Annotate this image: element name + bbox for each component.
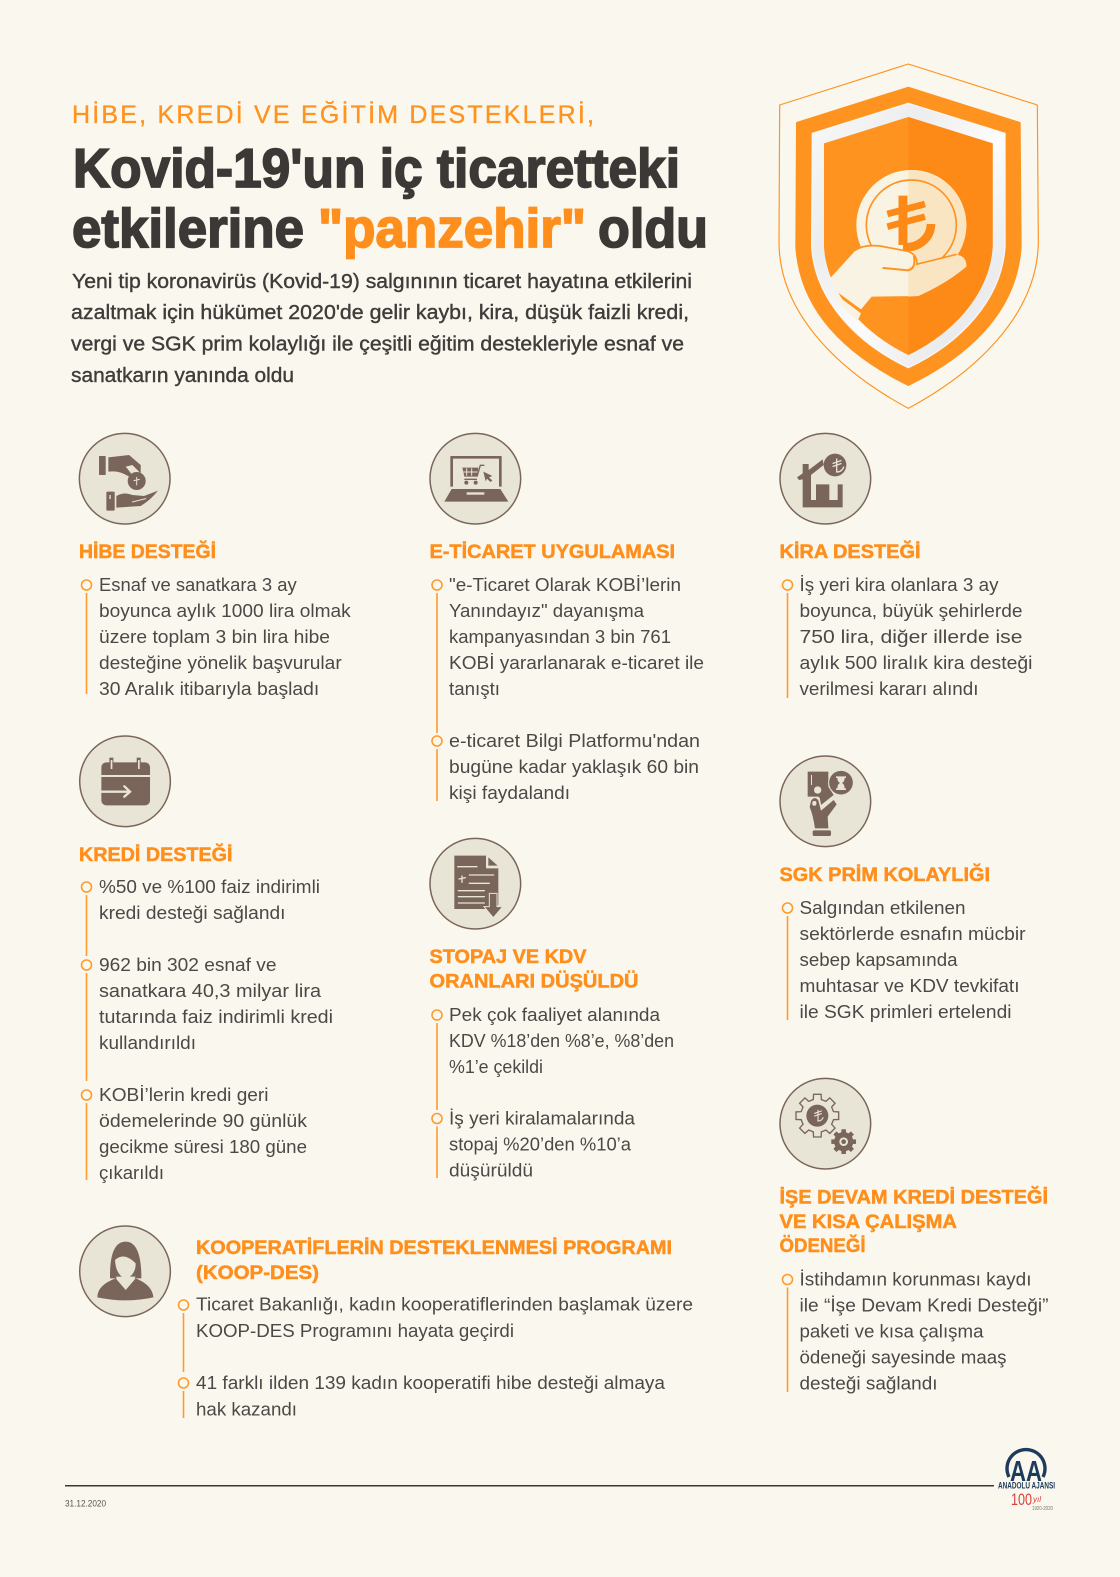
body text: kampanyasından 3 bin 761 xyxy=(449,626,671,647)
icon: gears xyxy=(780,1078,871,1169)
body text: aylık 500 liralık kira desteği xyxy=(800,652,1032,673)
intro text: Yeni tip koronavirüs (Kovid-19) salgınının ticaret hayatına etkilerini xyxy=(72,270,692,293)
logo: anadolu ajansı: yıl xyxy=(1032,1495,1041,1504)
header block xyxy=(71,100,708,387)
bullet marker xyxy=(432,580,442,733)
body text: tanıştı xyxy=(449,678,500,699)
body text: %50 ve %100 faiz indirimli xyxy=(99,876,320,897)
icon: laptop with cart xyxy=(430,433,521,524)
bullet marker xyxy=(82,580,92,694)
panel: sgk prim kolaylığı xyxy=(780,756,1026,1022)
intro text: vergi ve SGK prim kolaylığı ile çeşitli eğitim destekleriyle esnaf ve xyxy=(71,332,684,356)
intro text: azaltmak için hükümet 2020'de gelir kaybı, kira, düşük faizli kredi, xyxy=(71,301,689,324)
intro text xyxy=(71,270,692,387)
body text: paketi ve kısa çalışma xyxy=(800,1320,984,1341)
body text xyxy=(449,574,704,699)
icon: house with lira xyxy=(780,433,871,524)
heading: KİRA DESTEĞİ xyxy=(780,541,920,563)
body text: hak kazandı xyxy=(196,1398,297,1419)
bullet marker xyxy=(432,1114,442,1178)
body text: üzere toplam 3 bin lira hibe xyxy=(99,626,330,647)
body text: İş yeri kira olanlara 3 ay xyxy=(800,574,999,595)
body text xyxy=(99,876,320,923)
heading: VE KISA ÇALIŞMA xyxy=(780,1212,957,1233)
body text: muhtasar ve KDV tevkifatı xyxy=(800,975,1020,996)
panel: kredi desteği xyxy=(79,736,333,1183)
heading: KREDİ DESTEĞİ xyxy=(79,844,232,866)
body text xyxy=(800,574,1032,699)
heading xyxy=(196,1238,672,1284)
icon: shield with coin and hand xyxy=(779,64,1038,408)
kicker: HİBE, KREDİ VE EĞİTİM DESTEKLERİ, xyxy=(72,100,594,129)
body text: Pek çok faaliyet alanında xyxy=(449,1004,661,1025)
body text: Salgından etkilenen xyxy=(800,897,966,918)
body text: desteğine yönelik başvurular xyxy=(99,652,342,673)
icon: calendar xyxy=(80,736,170,827)
title: "panzehir" xyxy=(318,197,586,259)
body text: "e-Ticaret Olarak KOBİ’lerin xyxy=(449,574,681,595)
body text: çıkarıldı xyxy=(99,1162,164,1183)
bullet marker xyxy=(432,736,442,801)
heading: E-TİCARET UYGULAMASI xyxy=(430,542,675,563)
body text: İş yeri kiralamalarında xyxy=(449,1107,636,1128)
body text: Ticaret Bakanlığı, kadın kooperatiflerinden başlamak üzere xyxy=(196,1294,693,1315)
body text: kişi faydalandı xyxy=(449,782,570,803)
title xyxy=(72,137,708,259)
title: oldu xyxy=(598,197,708,259)
body text xyxy=(800,897,1026,1022)
panel: işe devam kredi desteği xyxy=(780,1078,1048,1393)
body text: sektörlerde esnafın mücbir xyxy=(800,923,1026,944)
heading: SGK PRİM KOLAYLIĞI xyxy=(780,864,990,886)
heading: ÖDENEĞİ xyxy=(780,1235,866,1257)
body text: Esnaf ve sanatkara 3 ay xyxy=(99,574,297,595)
intro text: sanatkarın yanında oldu xyxy=(71,364,294,387)
logo: anadolu ajansı: ANADOLU AJANSI xyxy=(998,1481,1055,1491)
body text: 962 bin 302 esnaf ve xyxy=(99,954,276,975)
body text: boyunca, büyük şehirlerde xyxy=(800,600,1022,621)
bullet marker xyxy=(82,1090,92,1180)
body text: İstihdamın korunması kaydı xyxy=(800,1268,1032,1289)
heading: KOOPERATİFLERİN DESTEKLENMESİ PROGRAMI xyxy=(196,1238,672,1259)
bullet marker xyxy=(82,960,92,1081)
bullet marker xyxy=(178,1378,188,1418)
body text: gecikme süresi 180 güne xyxy=(99,1136,307,1157)
body text: KOOP-DES Programını hayata geçirdi xyxy=(196,1320,514,1341)
bullet marker xyxy=(82,882,92,956)
title: Kovid-19'un iç ticaretteki xyxy=(73,137,680,199)
logo: anadolu ajansı xyxy=(998,1450,1055,1512)
logo: anadolu ajansı: AA xyxy=(1010,1456,1042,1488)
body text xyxy=(99,954,333,1053)
body text: 750 lira, diğer illerde ise xyxy=(800,626,1022,647)
body text: stopaj %20’den %10’a xyxy=(449,1133,632,1154)
body text: düşürüldü xyxy=(449,1159,533,1180)
body text: verilmesi kararı alındı xyxy=(800,678,978,699)
heading xyxy=(430,947,638,992)
body text: KDV %18’den %8’e, %8’den xyxy=(449,1030,674,1051)
body text: kullandırıldı xyxy=(99,1032,196,1053)
body text xyxy=(99,574,351,699)
body text xyxy=(99,1084,308,1183)
body text xyxy=(449,1004,674,1077)
bullet marker xyxy=(782,580,792,698)
heading: ORANLARI DÜŞÜLDÜ xyxy=(430,972,638,992)
icon: grant hands xyxy=(79,433,170,524)
body text: desteği sağlandı xyxy=(800,1372,938,1393)
body text xyxy=(196,1294,693,1341)
body text: boyunca aylık 1000 lira olmak xyxy=(99,600,351,621)
body text: ile SGK primleri ertelendi xyxy=(800,1001,1012,1022)
body text: ödemelerinde 90 günlük xyxy=(99,1110,308,1131)
panel: kira desteği xyxy=(780,433,1032,699)
body text: %1’e çekildi xyxy=(449,1056,543,1077)
body text xyxy=(449,1108,636,1180)
bullet marker xyxy=(178,1300,188,1372)
date: 31.12.2020 xyxy=(65,1499,106,1510)
body text xyxy=(196,1372,666,1419)
bullet marker xyxy=(432,1010,442,1110)
body text: ödeneği sayesinde maaş xyxy=(800,1346,1006,1367)
icon: hand with banknote and hourglass xyxy=(780,756,871,847)
panel: e-ticaret uygulaması xyxy=(430,433,704,803)
body text: 30 Aralık itibarıyla başladı xyxy=(99,678,319,699)
body text xyxy=(449,730,700,803)
logo: anadolu ajansı: 1920-2020 xyxy=(1032,1506,1053,1512)
footer xyxy=(65,1450,1055,1512)
bullet marker xyxy=(782,903,792,1020)
body text: ile “İşe Devam Kredi Desteği” xyxy=(800,1294,1048,1315)
heading: HİBE DESTEĞİ xyxy=(79,541,216,563)
icon: woman xyxy=(80,1226,170,1317)
body text: tutarında faiz indirimli kredi xyxy=(99,1006,333,1027)
body text: 41 farklı ilden 139 kadın kooperatifi hibe desteği almaya xyxy=(196,1372,666,1393)
icon: tax document xyxy=(430,838,521,929)
body text xyxy=(800,1268,1048,1393)
heading: İŞE DEVAM KREDİ DESTEĞİ xyxy=(780,1186,1048,1208)
heading xyxy=(780,1186,1048,1257)
logo: anadolu ajansı: 100 xyxy=(1011,1490,1032,1509)
body text: bugüne kadar yaklaşık 60 bin xyxy=(449,756,699,777)
panel: stopaj ve kdv xyxy=(430,838,674,1180)
body text: KOBİ’lerin kredi geri xyxy=(99,1084,268,1105)
panel: koop-des xyxy=(80,1226,693,1419)
body text: sanatkara 40,3 milyar lira xyxy=(99,980,322,1001)
heading: (KOOP-DES) xyxy=(196,1263,319,1284)
title: etkilerine xyxy=(72,197,304,259)
heading: STOPAJ VE KDV xyxy=(430,947,587,968)
body text: Yanındayız" dayanışma xyxy=(449,600,645,621)
bullet marker xyxy=(782,1274,792,1392)
body text: KOBİ yararlanarak e-ticaret ile xyxy=(449,652,704,673)
panel: hibe desteği xyxy=(79,433,351,699)
body text: kredi desteği sağlandı xyxy=(99,902,286,923)
body text: sebep kapsamında xyxy=(800,949,958,970)
body text: e-ticaret Bilgi Platformu'ndan xyxy=(449,730,700,751)
